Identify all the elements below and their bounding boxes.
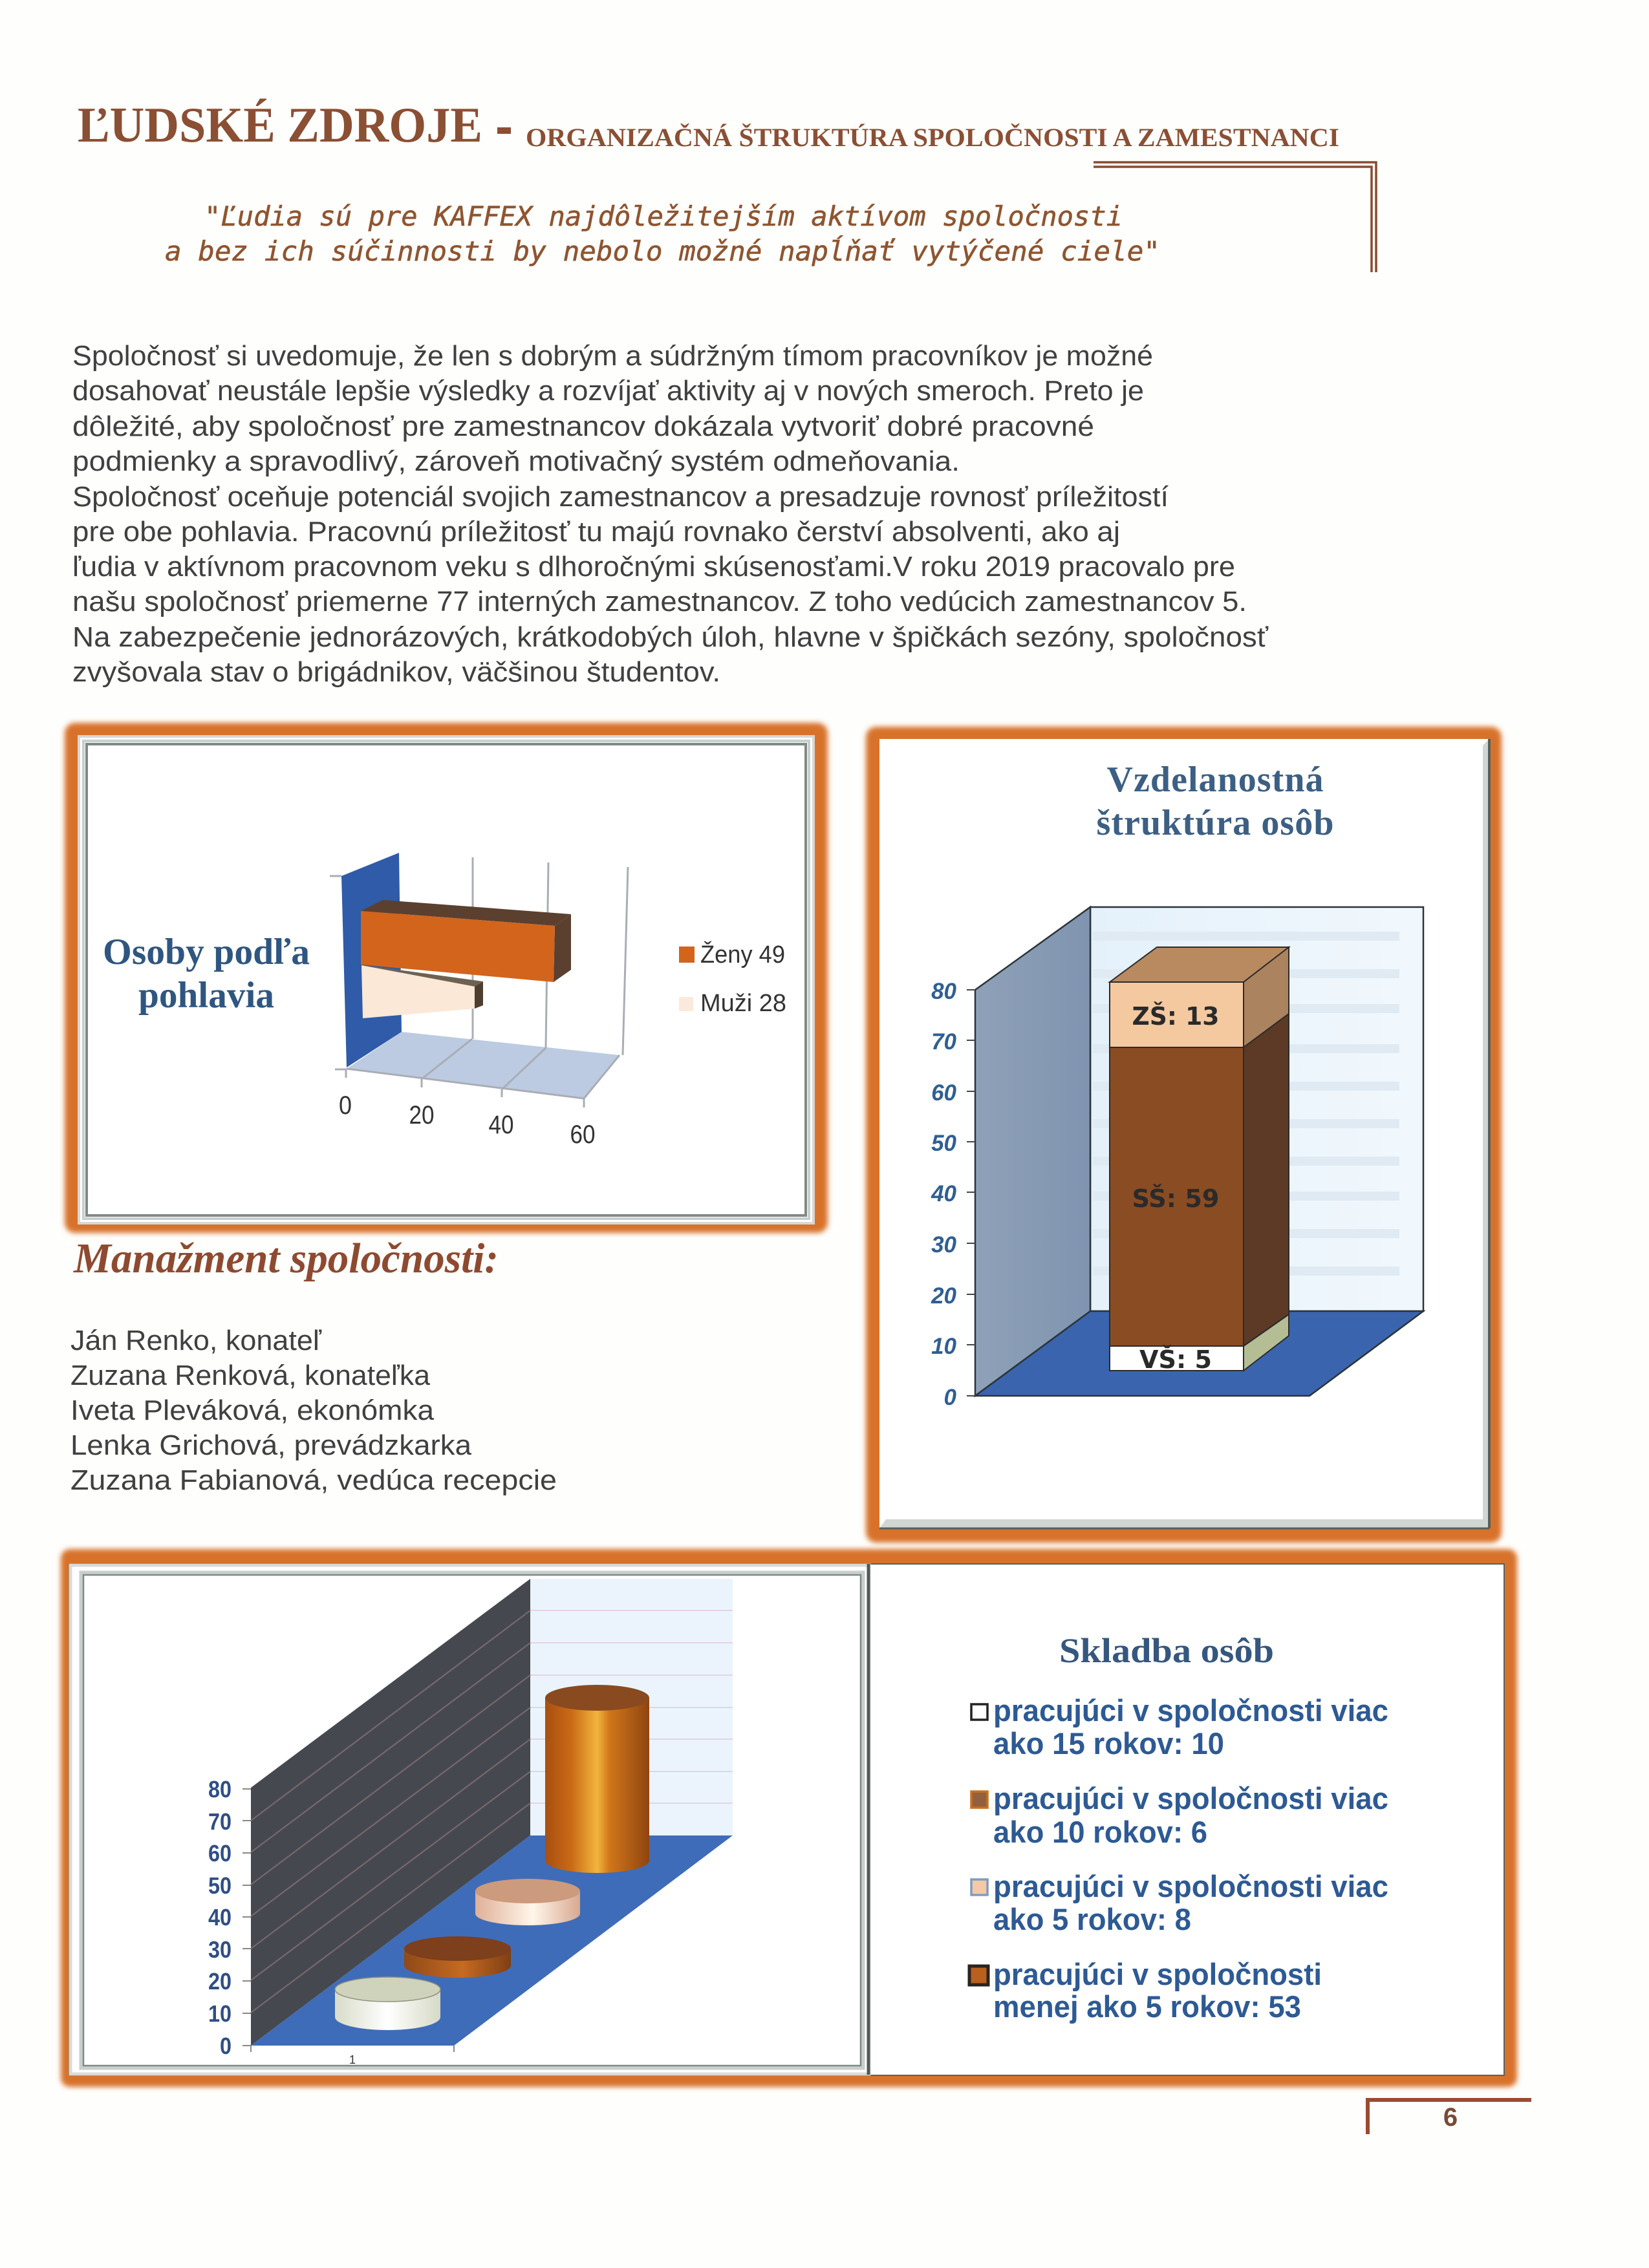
legend item: 15 years (971, 1693, 1388, 1760)
axis labels: tenure: 50 (208, 1872, 232, 1899)
cylinder chart (242, 1579, 733, 2052)
management list: Zuzana Fabianová, vedúca recepcie (70, 1464, 557, 1496)
body text: dosahovať neustále lepšie výsledky a rozvíjať aktivity aj v nových smeroch. Preto je (72, 375, 1144, 407)
legend: gender (679, 941, 786, 1017)
axis labels: tenure: 0 (220, 2033, 232, 2059)
heading: gender: Osoby podľa (103, 932, 310, 972)
panel: education (866, 727, 1502, 1543)
legend: tenure (969, 1693, 1388, 2024)
bar chart: gender (330, 853, 628, 1107)
panel: gender (65, 723, 828, 1233)
axis labels: education: 10 (931, 1334, 957, 1359)
body text: zvyšovala stav o brigádnikov, väčšinou študentov. (72, 656, 720, 688)
legend item: 5 years (971, 1869, 1388, 1936)
body text: podmienky a spravodlivý, zároveň motivačný systém odmeňovania. (72, 445, 960, 477)
legend item: 10 years: ako 10 rokov: 6 (993, 1815, 1207, 1849)
legend item: under 5 years: pracujúci v spoločnosti (993, 1957, 1322, 1991)
title: ORGANIZAČNÁ ŠTRUKTÚRA SPOLOČNOSTI A ZAMESTNANCI (526, 123, 1339, 152)
axis labels: tenure: 20 (208, 1968, 232, 1995)
body text (72, 340, 1269, 688)
body text: ľudia v aktívnom pracovnom veku s dlhoročnými skúsenosťami.V roku 2019 pracovalo pre (72, 551, 1235, 583)
bar labels: ZŠ: 13 (1132, 1002, 1220, 1031)
quote: "Ľudia sú pre KAFFEX najdôležitejším aktívom spoločnosti (204, 200, 1123, 232)
management list: Iveta Pleváková, ekonómka (70, 1395, 435, 1426)
legend item: 5 years: ako 5 rokov: 8 (993, 1902, 1191, 1936)
management list (70, 1325, 557, 1496)
heading: education (1097, 760, 1333, 843)
heading: gender (103, 932, 310, 1016)
axis labels: tenure: 30 (208, 1936, 232, 1963)
body text: dôležité, aby spoločnosť pre zamestnancov dokázala vytvoriť dobré pracovné (72, 411, 1094, 442)
axis labels: education: 0 (944, 1385, 957, 1410)
cylinder: viac ako 5 rokov (475, 1879, 580, 1925)
heading: education: Vzdelanostná (1107, 760, 1323, 800)
axis labels: tenure: 1 (349, 2053, 356, 2066)
heading: tenure: Skladba osôb (1059, 1631, 1274, 1670)
chart axis labels (339, 1091, 595, 1149)
chart axis labels: 20 (409, 1101, 435, 1129)
page number (1368, 2100, 1531, 2134)
body text: Spoločnosť oceňuje potenciál svojich zamestnancov a presadzuje rovnosť príležitostí (72, 481, 1169, 513)
legend item: under 5 years (969, 1957, 1322, 2024)
bar labels: VŠ: 5 (1139, 1345, 1212, 1374)
axis labels: tenure: 10 (208, 2000, 232, 2027)
legend item: 5 years: pracujúci v spoločnosti viac (993, 1869, 1388, 1903)
axis labels: education: 50 (931, 1131, 957, 1156)
legend item: 10 years (971, 1781, 1388, 1849)
title: ĽUDSKÉ ZDROJE (78, 97, 482, 153)
axis labels: tenure (208, 1776, 356, 2066)
axis labels: tenure: 70 (208, 1808, 232, 1835)
axis labels: education: 30 (931, 1232, 957, 1257)
axis labels: education: 20 (931, 1283, 957, 1309)
management list: Ján Renko, konateľ (70, 1325, 322, 1356)
legend item: 15 years: pracujúci v spoločnosti viac (993, 1693, 1388, 1728)
cylinder: viac ako 15 rokov (335, 1977, 440, 2030)
axis labels: education: 80 (931, 979, 957, 1004)
heading: education: štruktúra osôb (1097, 803, 1333, 843)
chart axis labels: 40 (489, 1111, 513, 1139)
panel: tenure (61, 1549, 1517, 2087)
axis labels: education: 60 (931, 1080, 957, 1106)
legend: gender: Ženy 49 (700, 941, 785, 968)
header corner rule (1094, 162, 1376, 272)
axis labels: tenure: 60 (208, 1840, 232, 1867)
axis labels: tenure: 80 (208, 1776, 232, 1803)
cylinder: menej ako 5 rokov (545, 1685, 649, 1873)
body text: pre obe pohlavia. Pracovnú príležitosť tu majú rovnako čerství absolventi, ako aj (72, 516, 1120, 548)
heading: management: Manažment spoločnosti: (73, 1235, 499, 1282)
body text: Spoločnosť si uvedomuje, že len s dobrým a súdržným tímom pracovníkov je možné (72, 340, 1153, 372)
title (78, 97, 1339, 153)
chart axis labels: 60 (570, 1120, 595, 1149)
legend item: 10 years: pracujúci v spoločnosti viac (993, 1781, 1388, 1815)
body text: Na zabezpečenie jednorázových, krátkodobých úloh, hlavne v špičkách sezóny, spoločnosť (72, 621, 1269, 653)
axis labels: tenure: 40 (208, 1904, 232, 1931)
axis labels: education: 70 (931, 1029, 957, 1054)
chart axis labels: 0 (339, 1091, 352, 1120)
quote: a bez ich súčinnosti by nebolo možné napĺňať vytýčené ciele" (165, 235, 1160, 267)
heading: gender: pohlavia (138, 975, 274, 1016)
stacked 3D column chart (967, 907, 1423, 1396)
axis labels: education: 40 (931, 1181, 957, 1206)
management list: Zuzana Renková, konateľka (70, 1360, 431, 1391)
legend: gender: Muži 28 (700, 990, 786, 1017)
legend item: 15 years: ako 15 rokov: 10 (993, 1726, 1224, 1760)
quote (165, 200, 1160, 267)
axis labels: education (931, 979, 957, 1410)
management list: Lenka Grichová, prevádzkarka (70, 1429, 472, 1461)
page number: 6 (1443, 2103, 1458, 2132)
legend item: under 5 years: menej ako 5 rokov: 53 (993, 1989, 1301, 2024)
body text: našu spoločnosť priemerne 77 interných zamestnancov. Z toho vedúcich zamestnancov 5. (72, 586, 1247, 617)
bar labels: SŠ: 59 (1132, 1184, 1220, 1213)
cylinder: viac ako 10 rokov (404, 1936, 511, 1978)
bar labels (1132, 1002, 1220, 1374)
